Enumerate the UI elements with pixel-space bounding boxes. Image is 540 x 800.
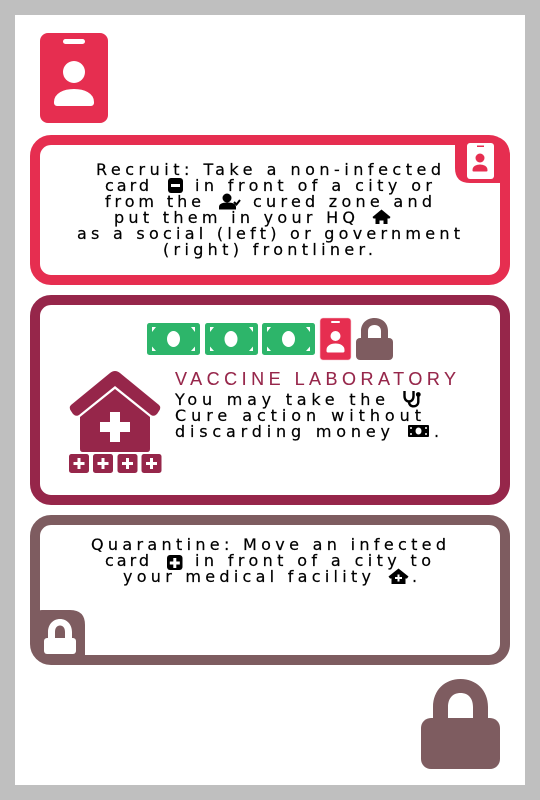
text: vaccine laboratory rule: You may take the — [174, 390, 385, 409]
text: quarantine rule: your medical facility — [123, 567, 371, 586]
text: recruit rules: cured zone and — [253, 192, 432, 211]
text: recruit rules: card — [105, 176, 149, 195]
icon: laboratory house — [69, 371, 162, 473]
text: recruit rules: as a social (left) or government — [77, 224, 460, 243]
text: recruit rules: (right) frontliner. — [163, 240, 373, 259]
icon: large ID badge — [40, 33, 108, 123]
text: vaccine laboratory rule: Cure action without — [175, 406, 421, 425]
icon: four infected cards — [69, 454, 162, 473]
text: recruit rules: put them in your HQ — [114, 208, 355, 227]
icon: HQ house — [372, 210, 390, 224]
cost: ID badge — [320, 318, 351, 360]
icon: money — [408, 425, 429, 437]
icon: medical facility — [388, 568, 408, 584]
text: recruit rules: from the — [105, 192, 201, 211]
text: vaccine laboratory rule: . — [434, 422, 439, 441]
panel: quarantine — [35, 520, 505, 660]
text: quarantine rule: . — [412, 567, 417, 586]
panel: recruit — [35, 136, 510, 280]
cost: lock — [356, 318, 393, 360]
icon: non-infected card — [168, 178, 183, 193]
icon: lock corner tab — [38, 610, 85, 659]
heading: vaccine laboratory: VACCINE LABORATORY — [175, 369, 456, 389]
text: quarantine rule: Quarantine: Move an infected — [91, 535, 446, 554]
text: recruit rules — [77, 160, 460, 259]
text: vaccine laboratory rule — [174, 390, 439, 441]
text: vaccine laboratory rule: discarding money — [175, 422, 390, 441]
cost: money bills — [147, 323, 315, 355]
icon: infected card — [167, 555, 182, 570]
icon: cured person — [219, 194, 240, 210]
text: quarantine rule — [91, 535, 446, 586]
text: quarantine rule: in front of a city to — [195, 551, 431, 570]
text: quarantine rule: card — [105, 551, 149, 570]
icon: large lock — [421, 679, 500, 769]
icon: ID badge corner tab — [455, 136, 510, 183]
icon: stethoscope — [404, 391, 419, 406]
text: recruit rules: Recruit: Take a non-infected — [96, 160, 441, 179]
text: recruit rules: in front of a city or — [195, 176, 432, 195]
panel: vaccine laboratory — [35, 300, 505, 500]
